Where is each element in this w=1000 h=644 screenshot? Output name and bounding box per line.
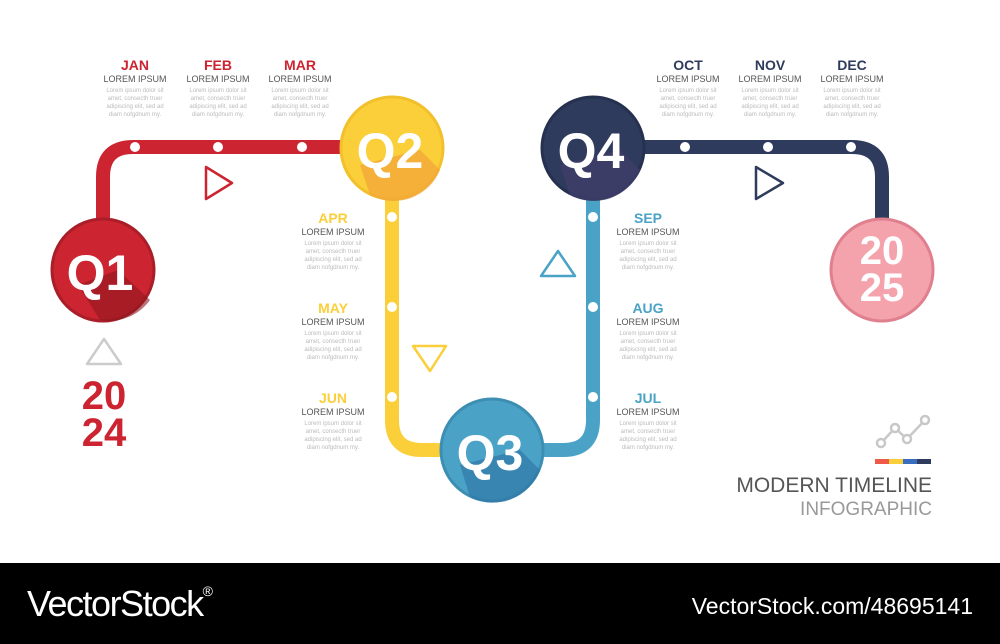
year 2024: 20 <box>82 374 126 418</box>
text: JAN <box>103 57 166 118</box>
text: JUN: JUN <box>319 390 347 406</box>
year 2024 <box>82 374 127 455</box>
text: MAY: Lorem ipsum dolor sit amet, consecth truer adipiscing elit, sed ad diam nofgdnum my. <box>304 331 362 361</box>
text: SEP: LOREM IPSUM <box>616 227 680 237</box>
text: APR: APR <box>318 210 348 226</box>
text: FEB: LOREM IPSUM <box>186 74 250 84</box>
circle Q2: Q2 <box>357 123 423 179</box>
text: DEC: Lorem ipsum dolor sit amet, consecth truer adipiscing elit, sed ad diam nofgdnum my. <box>823 88 881 118</box>
text: MAY <box>301 300 364 361</box>
text: MAY: MAY <box>318 300 348 316</box>
circle 2025 <box>831 219 933 321</box>
text: DEC: LOREM IPSUM <box>820 74 884 84</box>
text: NOV: Lorem ipsum dolor sit amet, consecth truer adipiscing elit, sed ad diam nofgdnum my. <box>741 88 799 118</box>
circle Q1 <box>52 219 154 321</box>
text: AUG: AUG <box>632 300 664 316</box>
title: MODERN TIMELINE <box>736 474 932 497</box>
text: APR: LOREM IPSUM <box>301 227 364 237</box>
circle Q3 <box>441 399 543 503</box>
title <box>736 474 932 520</box>
text: NOV: NOV <box>755 57 785 73</box>
text: JAN: LOREM IPSUM <box>103 74 166 84</box>
path: blue Q3 to Q4 <box>492 150 593 450</box>
text: APR: Lorem ipsum dolor sit amet, consecth truer adipiscing elit, sed ad diam nofgdnum my. <box>304 241 362 271</box>
text: FEB: FEB <box>204 57 232 73</box>
text: OCT <box>656 57 720 118</box>
text: OCT: OCT <box>673 57 703 73</box>
text: MAR: Lorem ipsum dolor sit amet, consecth truer adipiscing elit, sed ad diam nofgdnum my. <box>271 88 329 118</box>
path: yellow Q2 to Q3 <box>392 148 492 450</box>
circle Q4: Q4 <box>558 123 625 179</box>
text: AUG <box>616 300 680 361</box>
text: FEB: Lorem ipsum dolor sit amet, consecth truer adipiscing elit, sed ad diam nofgdnum my. <box>189 88 247 118</box>
title: INFOGRAPHIC <box>800 499 932 520</box>
footer bar <box>0 563 1000 644</box>
footer logo: VectorStock® <box>27 583 211 624</box>
dots <box>130 142 856 402</box>
text: SEP <box>616 210 680 271</box>
text: SEP: SEP <box>634 210 662 226</box>
text: MAR <box>268 57 332 118</box>
circle 2025: 20 <box>860 229 904 273</box>
text: OCT: Lorem ipsum dolor sit amet, consecth truer adipiscing elit, sed ad diam nofgdnum my. <box>659 88 717 118</box>
circle Q1: Q1 <box>67 245 133 301</box>
arrows <box>87 167 783 371</box>
text: JUL <box>616 390 680 451</box>
circle Q4 <box>542 97 644 201</box>
circle Q3: Q3 <box>457 425 523 481</box>
text: APR <box>301 210 364 271</box>
text: SEP: Lorem ipsum dolor sit amet, consecth truer adipiscing elit, sed ad diam nofgdnum my. <box>619 241 677 271</box>
text: JAN: JAN <box>121 57 149 73</box>
footer url: VectorStock.com/48695141 <box>692 593 973 619</box>
icon: line chart <box>877 416 929 447</box>
text: JUL: LOREM IPSUM <box>616 407 680 417</box>
text: AUG: Lorem ipsum dolor sit amet, consecth truer adipiscing elit, sed ad diam nofgdnum my. <box>619 331 677 361</box>
color bar <box>875 459 931 464</box>
text: OCT: LOREM IPSUM <box>656 74 720 84</box>
circle Q2 <box>341 97 443 201</box>
text: DEC: DEC <box>837 57 867 73</box>
text: JUN: Lorem ipsum dolor sit amet, consecth truer adipiscing elit, sed ad diam nofgdnum my. <box>304 421 362 451</box>
text: JAN: Lorem ipsum dolor sit amet, consecth truer adipiscing elit, sed ad diam nofgdnum my. <box>106 88 164 118</box>
text: JUL: JUL <box>635 390 661 406</box>
text: NOV <box>738 57 802 118</box>
text: FEB <box>186 57 250 118</box>
text: JUN: LOREM IPSUM <box>301 407 364 417</box>
text: MAR: MAR <box>284 57 316 73</box>
circle 2025: 25 <box>860 266 904 310</box>
text: MAY: LOREM IPSUM <box>301 317 364 327</box>
text: JUN <box>301 390 364 451</box>
text: AUG: LOREM IPSUM <box>616 317 680 327</box>
text: DEC <box>820 57 884 118</box>
text: NOV: LOREM IPSUM <box>738 74 802 84</box>
path: navy Q4 to 2025 <box>593 147 882 270</box>
text: MAR: LOREM IPSUM <box>268 74 332 84</box>
path: red Q1 to Q2 <box>103 147 392 270</box>
year 2024: 24 <box>82 411 127 455</box>
text: JUL: Lorem ipsum dolor sit amet, consecth truer adipiscing elit, sed ad diam nofgdnum my. <box>619 421 677 451</box>
